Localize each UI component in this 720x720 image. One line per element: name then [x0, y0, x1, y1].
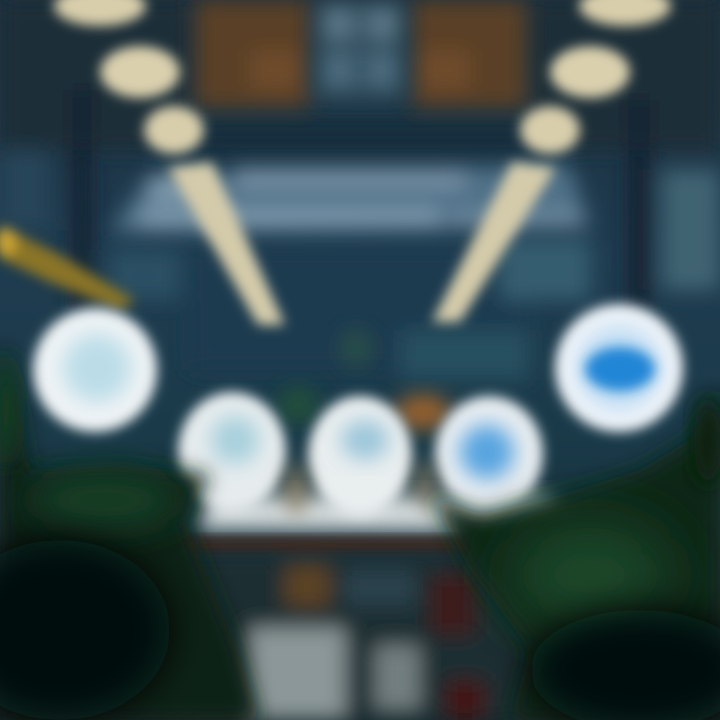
foliage: right — [430, 390, 720, 720]
icon circle: center left — [178, 392, 286, 512]
heading: blurred light band — [110, 165, 590, 232]
ceiling: wood panels — [195, 0, 527, 108]
shelf: dark red bar — [165, 538, 570, 552]
icon circle: center — [308, 396, 412, 516]
icon circle: center right — [435, 396, 543, 512]
orange accent — [395, 394, 451, 430]
right hanging beads — [432, 0, 671, 322]
icon circle: left — [33, 308, 157, 432]
base: white platform — [195, 495, 575, 532]
background: window grid — [0, 0, 720, 380]
left hanging beads — [54, 0, 285, 325]
lower structure — [180, 555, 540, 720]
foliage: left — [0, 340, 260, 720]
green accent — [278, 387, 318, 423]
icon circle: right — [555, 304, 683, 432]
ceiling: central skylight — [315, 0, 405, 100]
gold diagonal arrow — [0, 225, 135, 310]
small center marker — [340, 330, 372, 366]
base: warm gaps between circles — [286, 461, 433, 516]
